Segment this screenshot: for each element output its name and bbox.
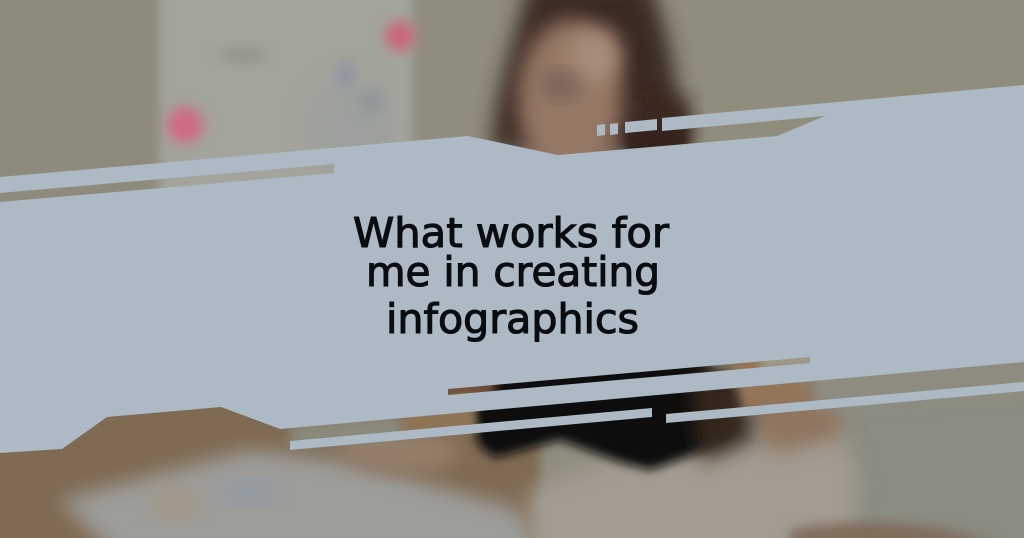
title: What works for (353, 209, 669, 257)
title (353, 209, 669, 343)
title: me in creating (366, 248, 660, 296)
lower scene: table, paper, torso, arms, wall (0, 335, 1024, 538)
title: infographics (386, 295, 639, 343)
panel: slanted blue-grey banner with cut-out stripes (0, 85, 1024, 453)
woman: hair and face (490, 0, 690, 180)
